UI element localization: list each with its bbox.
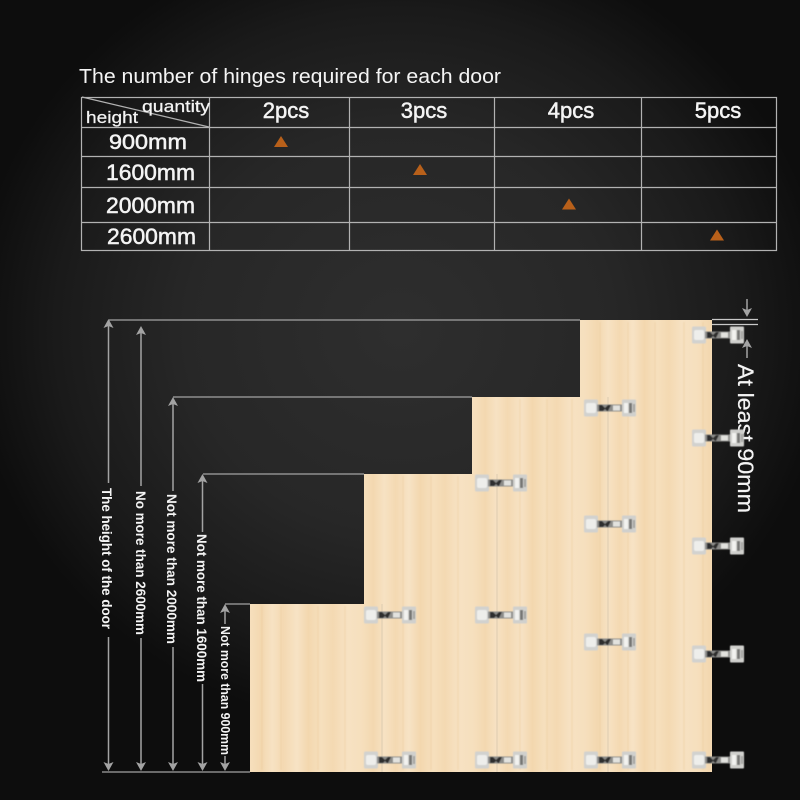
hinges: 5pcs door <box>692 326 744 768</box>
table grid <box>81 97 777 250</box>
hinges: 2pcs door <box>364 606 416 768</box>
dimension: the height of the door: The height of the door <box>99 488 114 630</box>
dimension: the height of the door <box>99 319 114 771</box>
dimension guide lines <box>102 320 580 772</box>
dimension: at least 90mm <box>712 299 758 513</box>
marker: 1600mm needs 3pcs <box>413 164 427 175</box>
dimension: not more than 2000mm: Not more than 2000mm <box>164 494 179 644</box>
title: The number of hinges required for each door <box>79 66 501 88</box>
dimension: not more than 1600mm <box>194 474 209 771</box>
column heading: 4pcs: 4pcs <box>548 98 594 123</box>
dimension: not more than 1600mm: Not more than 1600mm <box>194 534 209 682</box>
stepped wood doors <box>250 320 712 772</box>
dimension: not more than 900mm: Not more than 900mm <box>218 626 232 755</box>
row heading: 2000mm: 2000mm <box>106 193 195 218</box>
marker: 2600mm needs 5pcs <box>710 230 724 240</box>
row heading: 1600mm: 1600mm <box>106 160 195 185</box>
dimension: at least 90mm: At least 90mm <box>733 364 758 513</box>
table: hinges per door height <box>81 97 777 250</box>
hinges: 3pcs door <box>475 474 527 768</box>
column heading: 5pcs: 5pcs <box>695 98 741 123</box>
hinges: 4pcs door <box>584 400 636 768</box>
column heading: 2pcs: 2pcs <box>263 98 309 123</box>
header: height: height <box>86 108 138 127</box>
row heading: 2600mm: 2600mm <box>107 224 196 249</box>
dimension: no more than 2600mm <box>133 326 148 771</box>
header: quantity: quantity <box>142 97 211 116</box>
marker: 2000mm needs 4pcs <box>562 198 576 210</box>
column heading: 3pcs: 3pcs <box>401 98 447 123</box>
marker: 900mm needs 2pcs <box>274 136 288 147</box>
dimension: not more than 2000mm <box>164 397 179 771</box>
row heading: 900mm: 900mm <box>109 131 187 154</box>
dimension: no more than 2600mm: No more than 2600mm <box>133 491 148 635</box>
